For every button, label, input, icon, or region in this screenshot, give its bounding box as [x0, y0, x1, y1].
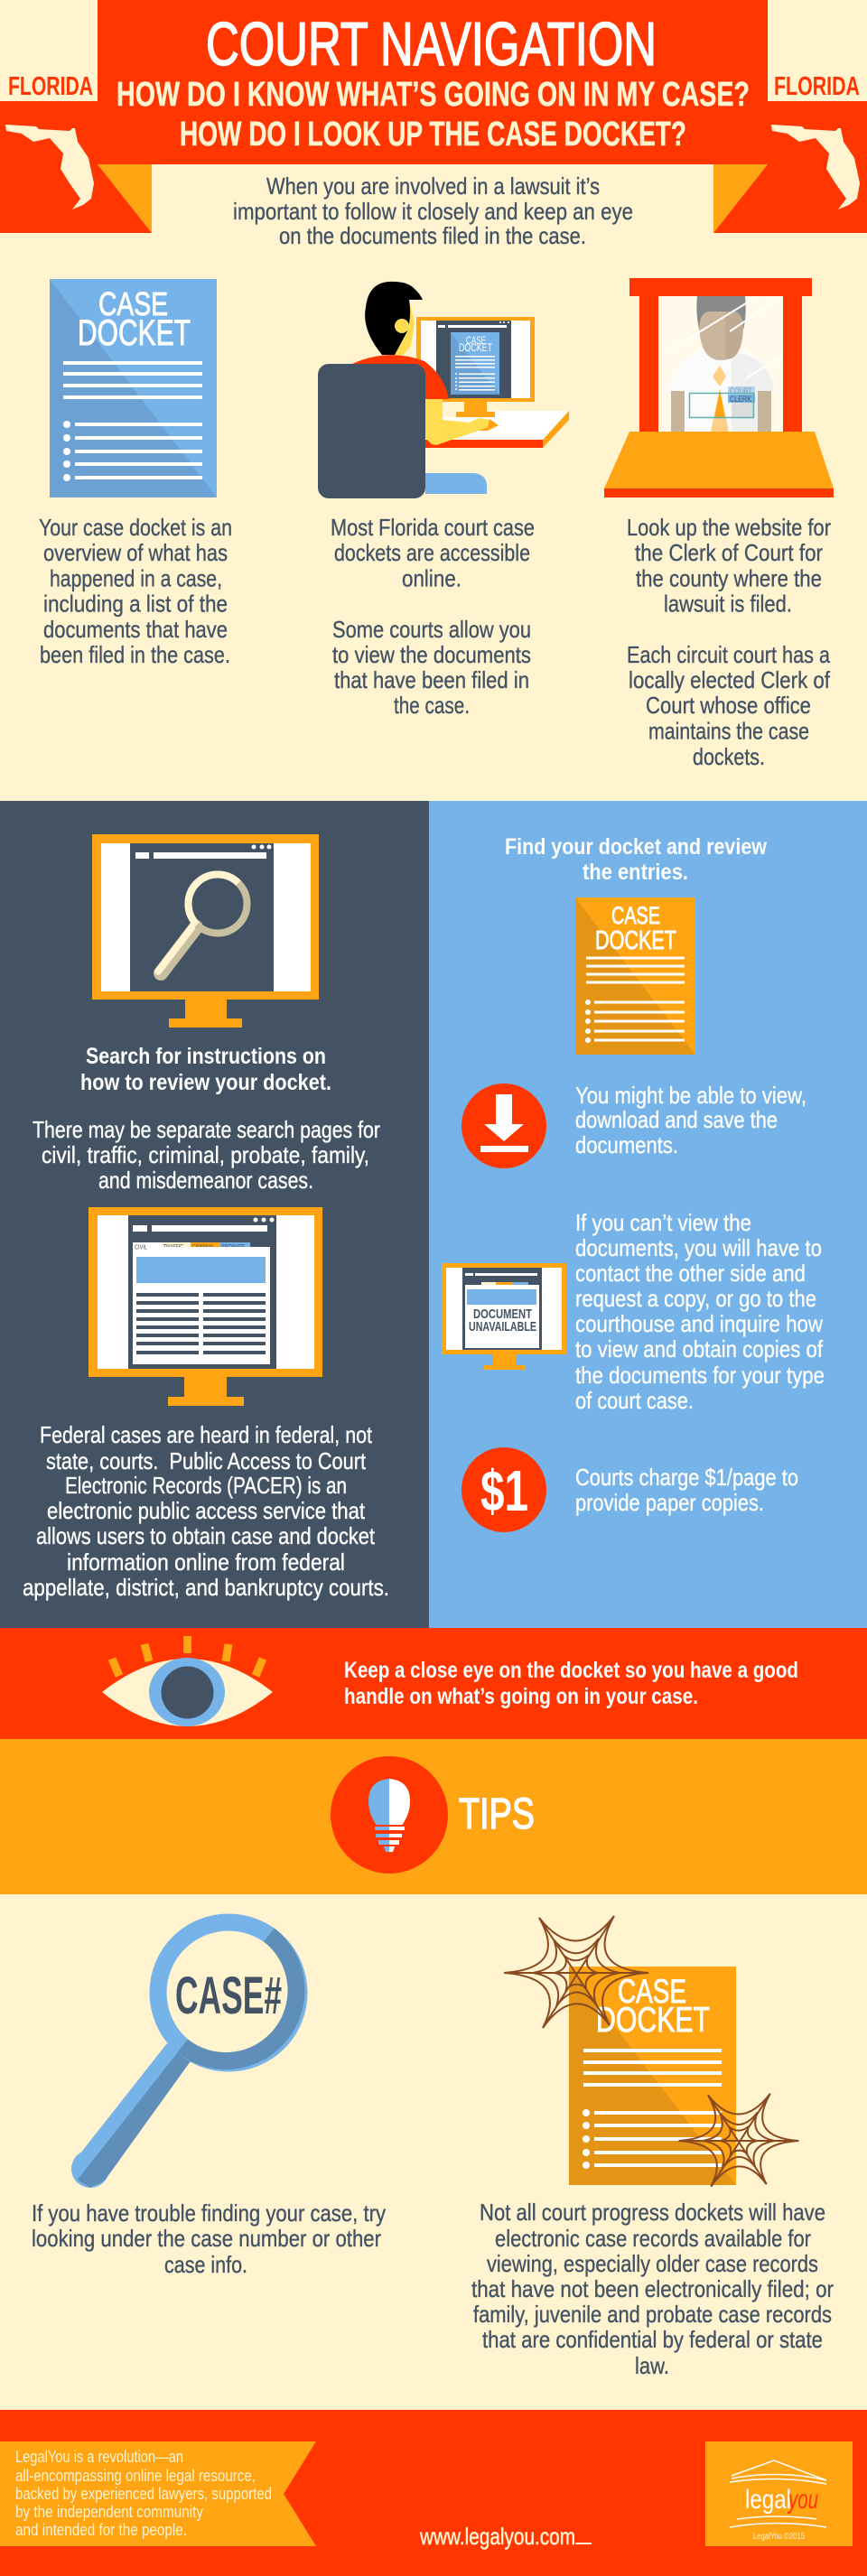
text: column 1: including a list of the — [43, 591, 228, 618]
logo: legal — [745, 2485, 791, 2515]
icon: orange case docket: DOCKET — [595, 926, 676, 955]
text: not all court progress dockets — [471, 2199, 834, 2379]
icon: eye — [102, 1636, 273, 1726]
intro text: important to follow it closely and keep an eye — [233, 198, 633, 225]
monitor: CASE — [466, 334, 486, 347]
icon: monitor with search page: CRIMINAL — [192, 1244, 215, 1251]
text: keep a close eye — [344, 1658, 798, 1709]
heading: tips: TIPS — [459, 1790, 535, 1838]
text: column 1: Your case docket is an — [39, 514, 232, 541]
text: request a copy: courthouse and inquire how — [575, 1310, 823, 1337]
intro text: When you are involved in a lawsuit it’s — [266, 172, 600, 200]
text: trouble finding your case: If you have trouble finding your case, try — [32, 2199, 386, 2227]
text: column 2: Most Florida court case — [331, 514, 535, 541]
band: tips — [0, 1739, 867, 1894]
text: column 3: locally elected Clerk of — [629, 666, 831, 693]
icon: Florida map right — [771, 125, 860, 209]
text: federal cases PACER: Federal cases are heard in federal, not — [40, 1421, 373, 1448]
shirt — [352, 355, 449, 399]
text: federal cases PACER: state, courts. Public Access to Court — [46, 1447, 367, 1474]
icon: monitor document unavailable — [442, 1263, 566, 1370]
panel: search instructions — [0, 801, 429, 1628]
text: not all court progress dockets: electronic case records available for — [495, 2225, 811, 2252]
text: column 3: Each circuit court has a — [627, 641, 830, 668]
icon: orange case docket: CASE — [611, 902, 660, 929]
icon: monitor document unavailable: UNAVAILABLE — [469, 1319, 536, 1334]
glass glare — [668, 299, 783, 378]
text: view and download: download and save the — [575, 1106, 778, 1133]
website: www.legalyou.com — [419, 2523, 575, 2550]
icon: monitor document unavailable: DOCUMENT — [473, 1307, 532, 1322]
clerk: COURT — [730, 386, 752, 395]
counter — [604, 432, 834, 488]
icon: one dollar: $1 — [480, 1458, 528, 1523]
icon: blue case docket: CASE — [98, 285, 168, 322]
text: column 3: the county where the — [636, 565, 822, 592]
icon: person at computer — [318, 282, 569, 498]
text: request a copy: request a copy, or go to the — [575, 1285, 816, 1312]
head — [365, 282, 423, 355]
icon: cobweb lower right — [679, 2094, 798, 2187]
left ribbon — [0, 101, 152, 233]
logo: you — [788, 2485, 818, 2515]
text: trouble finding your case: looking under the case number or other — [32, 2225, 381, 2252]
text: request a copy: to view and obtain copies of — [575, 1335, 824, 1362]
text: request a copy: contact the other side and — [575, 1260, 806, 1287]
icon: orange case docket — [575, 897, 695, 1055]
text: column 3: maintains the case — [648, 718, 809, 745]
text: courts charge: provide paper copies. — [575, 1489, 764, 1516]
footer ribbon: all-encompassing online legal resource, — [15, 2467, 256, 2485]
heading: find your docket: the entries. — [583, 860, 688, 885]
icon: court clerk booth — [604, 278, 834, 498]
footer — [0, 2410, 867, 2576]
desk — [424, 411, 569, 448]
text: column 3: dockets. — [693, 743, 765, 770]
text: federal cases PACER: Electronic Records (PACER) is an — [65, 1472, 347, 1499]
intro text — [233, 172, 633, 249]
icon: big magnifier with case number: CASE# — [175, 1967, 282, 2025]
text: separate search pages: civil, traffic, criminal, probate, family, — [42, 1141, 369, 1168]
heading: find your docket — [505, 834, 767, 885]
text: column 1: happened in a case, — [50, 565, 222, 592]
icon: monitor with search page: PROBATE — [221, 1244, 245, 1251]
logo: LegalYou ©2015 — [753, 2532, 805, 2542]
text: column 3 — [627, 514, 831, 770]
clerk — [669, 296, 774, 432]
text: federal cases PACER: allows users to obtain case and docket — [36, 1522, 376, 1549]
icon: big magnifier with case number — [71, 1922, 299, 2188]
text: view and download: You might be able to view, — [575, 1082, 806, 1109]
text: courts charge — [575, 1464, 798, 1516]
window — [658, 296, 783, 432]
heading: search for instructions: Search for instructions on — [86, 1044, 326, 1069]
booth frame — [629, 278, 812, 432]
text: request a copy: documents, you will have to — [575, 1234, 822, 1261]
icon: light bulb — [331, 1756, 448, 1874]
text: column 3: lawsuit is filed. — [664, 591, 792, 618]
text: not all court progress dockets: law. — [635, 2352, 669, 2379]
subtitle line 2: HOW DO I LOOK UP THE CASE DOCKET? — [180, 116, 686, 153]
text: request a copy — [575, 1209, 825, 1414]
icon: blue case docket: DOCKET — [78, 313, 191, 353]
icon: cobweb upper left — [504, 1916, 648, 2028]
text: column 2: to view the documents — [332, 641, 531, 668]
text: federal cases PACER: electronic public access service that — [47, 1497, 366, 1524]
text: courts charge: Courts charge $1/page to — [575, 1464, 798, 1491]
text: request a copy: the documents for your type — [575, 1362, 825, 1389]
text: column 1: overview of what has — [43, 539, 228, 566]
logo — [705, 2441, 853, 2546]
footer ribbon: and intended for the people. — [15, 2521, 187, 2539]
text: trouble finding your case — [32, 2199, 386, 2278]
header banner — [0, 0, 867, 233]
label: Florida left: FLORIDA — [8, 72, 93, 101]
text: separate search pages — [33, 1116, 380, 1194]
icon: orange docket with cobwebs — [504, 1916, 798, 2187]
icon: monitor with search page: CIVIL — [135, 1244, 147, 1251]
icon: orange docket with cobwebs: CASE — [618, 1973, 686, 2010]
clerk: CLERK — [730, 395, 751, 404]
band: keep a close eye — [0, 1628, 867, 1739]
text: separate search pages: and misdemeanor cases. — [98, 1167, 313, 1194]
icon: monitor with search page: TRAFFIC — [163, 1244, 183, 1251]
text: federal cases PACER — [23, 1421, 389, 1601]
text: trouble finding your case: case info. — [164, 2251, 247, 2278]
text: column 1: been filed in the case. — [40, 641, 230, 668]
icon: orange docket with cobwebs: DOCKET — [596, 2001, 710, 2040]
icon: monitor with search page — [89, 1207, 322, 1406]
footer ribbon: backed by experienced lawyers, supported — [15, 2485, 272, 2503]
text: keep a close eye: handle on what’s going on in your case. — [344, 1684, 698, 1709]
text: column 2: the case. — [394, 692, 470, 719]
text: column 3: Court whose office — [646, 692, 811, 719]
text: federal cases PACER: information online from federal — [67, 1548, 345, 1576]
text: column 2: online. — [402, 565, 461, 592]
icon: Florida map left — [5, 125, 94, 209]
text: column 3: Look up the website for — [627, 514, 831, 541]
icon: one dollar — [461, 1447, 546, 1532]
icon: blue case docket — [50, 279, 217, 498]
text: separate search pages: There may be separate search pages for — [33, 1116, 380, 1143]
heading: search for instructions: how to review your docket. — [80, 1070, 331, 1095]
text: column 2 — [331, 514, 535, 719]
icon: download — [461, 1083, 546, 1168]
intro text: on the documents filed in the case. — [279, 222, 586, 249]
right ribbon — [713, 101, 867, 233]
monitor — [416, 317, 535, 417]
footer ribbon: LegalYou is a revolution—an — [15, 2448, 183, 2466]
text: column 1 — [39, 514, 232, 668]
text: request a copy: of court case. — [575, 1387, 694, 1414]
text: column 2: that have been filed in — [334, 666, 529, 693]
text: column 1: documents that have — [43, 616, 228, 643]
panel: find your docket — [429, 801, 867, 1628]
footer ribbon — [0, 2441, 316, 2546]
heading: find your docket: Find your docket and review — [505, 834, 767, 860]
legs — [425, 473, 487, 494]
text: view and download: documents. — [575, 1131, 678, 1158]
text: column 2: Some courts allow you — [332, 616, 531, 643]
text: request a copy: If you can’t view the — [575, 1209, 751, 1236]
title: COURT NAVIGATION — [206, 10, 657, 79]
text: column 2: dockets are accessible — [334, 539, 530, 566]
heading: search for instructions — [80, 1044, 331, 1095]
text: column 3: the Clerk of Court for — [635, 539, 823, 566]
arm — [425, 399, 499, 445]
monitor: DOCKET — [459, 341, 492, 354]
text: view and download — [575, 1082, 806, 1158]
chair — [318, 364, 425, 498]
central banner — [98, 0, 768, 164]
footer ribbon: by the independent community — [15, 2503, 203, 2521]
icon: monitor with magnifier — [92, 834, 319, 1028]
text: federal cases PACER: appellate, district, and bankruptcy courts. — [23, 1574, 389, 1601]
